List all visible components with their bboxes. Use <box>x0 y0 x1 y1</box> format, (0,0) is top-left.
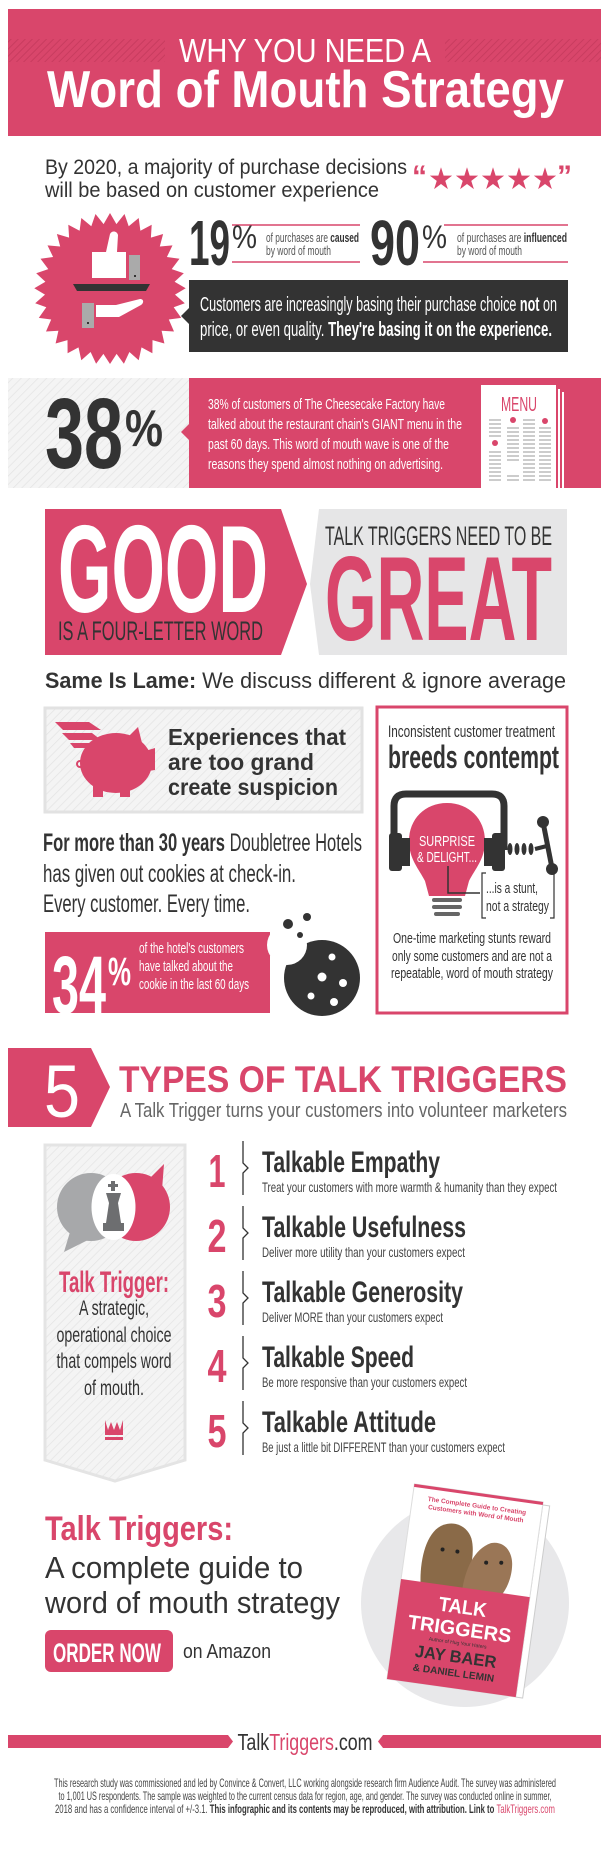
stat: 90% influenced: % <box>422 219 447 255</box>
text block: doubletree cookies: Every customer. Every time. <box>43 890 250 918</box>
stat: 90% influenced: by word of mouth <box>457 243 522 258</box>
stat: 90% influenced: of purchases are influenced <box>457 230 567 245</box>
icon: lightbulb with headphones and crank <box>389 794 558 916</box>
list: talkable speed: Talkable Speed <box>262 1341 414 1374</box>
list: talkable attitude: 5 <box>208 1405 226 1457</box>
panel: 38% cheesecake factory: % <box>125 400 163 458</box>
stat: 19% caused: 19 <box>189 207 230 279</box>
text block: book promo: word of mouth strategy <box>44 1585 340 1620</box>
stat: 90% influenced: 90 <box>370 207 420 279</box>
section heading: 5 types of talk triggers: 5 <box>44 1050 80 1133</box>
icon: bitten cookie <box>267 913 360 1016</box>
text block: doubletree cookies <box>43 829 362 918</box>
callout: experience box <box>181 280 568 352</box>
intro statement <box>44 156 407 202</box>
callout: is a stunt <box>482 873 554 918</box>
banner: good is a four-letter word: IS A FOUR-LETTER WORD <box>58 616 263 646</box>
stat: 34% cookie <box>45 932 279 1031</box>
footer: research note <box>54 1776 556 1816</box>
icon: lightbulb with headphones and crank: SURPRISE <box>419 833 475 850</box>
list: talkable usefulness: Talkable Usefulness <box>262 1211 466 1244</box>
icon: five stars in quotes: ” <box>557 160 572 193</box>
text block: book promo <box>44 1510 340 1620</box>
callout: is a stunt: ...is a stunt, <box>486 880 538 897</box>
panel: talk trigger definition ribbon: Talk Trigger: <box>59 1266 169 1299</box>
list: talkable empathy: Talkable Empathy <box>262 1146 440 1179</box>
list: talkable generosity <box>208 1271 463 1327</box>
text: experiences too grand: create suspicion <box>168 774 338 800</box>
icon: speech bubbles with chess king <box>57 1164 170 1252</box>
stat: 34% cookie: % <box>108 950 131 994</box>
stat: 19% caused <box>189 207 360 279</box>
illustration: talk triggers book <box>361 1484 569 1707</box>
icon: crown <box>105 1420 123 1440</box>
illustration: talk triggers book: Customers with Word of Mouth <box>428 1504 524 1524</box>
section heading: 5 types of talk triggers: TYPES OF TALK TRIGGERS <box>119 1059 567 1100</box>
text: experiences too grand <box>168 724 346 800</box>
icon: five stars in quotes: ★★★★★ <box>428 163 558 196</box>
illustration: talk triggers book: JAY BAER <box>414 1642 498 1672</box>
panel: talk trigger definition ribbon: of mouth. <box>84 1377 144 1400</box>
illustration: talk triggers book: The Complete Guide to Creating <box>427 1496 527 1517</box>
text: cheesecake factory description: talked about the restaurant chain's GIANT menu in the <box>208 416 462 433</box>
footer: website banner: TalkTriggers.com <box>238 1729 372 1755</box>
panel: talk trigger definition ribbon: that compels word <box>56 1350 172 1373</box>
text block: book promo: A complete guide to <box>45 1550 303 1585</box>
icon: starburst with thumbs up and hand <box>34 213 186 364</box>
list: talkable empathy: 1 <box>208 1145 226 1197</box>
illustration: talk triggers book: TALK <box>437 1594 488 1622</box>
text: cheesecake factory description: past 60 days. This word of mouth wave is one of the <box>208 436 449 453</box>
stat: 34% cookie: have talked about the <box>139 958 233 975</box>
list: talkable usefulness: 2 <box>208 1210 226 1262</box>
panel: 38% cheesecake factory <box>8 378 601 490</box>
banner: good is a four-letter word <box>45 501 307 655</box>
list: talkable empathy <box>208 1141 557 1197</box>
list: talkable generosity: Talkable Generosity <box>262 1276 463 1309</box>
intro statement: will be based on customer experience <box>44 179 379 202</box>
text: one-time stunts <box>391 930 553 982</box>
list: talkable attitude <box>208 1401 505 1457</box>
icon: five stars in quotes: “ <box>412 160 427 193</box>
intro statement: By 2020, a majority of purchase decisions <box>45 156 407 179</box>
text: on amazon: on Amazon <box>183 1641 271 1663</box>
text: cheesecake factory description: 38% of customers of The Cheesecake Factory have <box>208 396 445 413</box>
button: order now: ORDER NOW <box>53 1638 161 1668</box>
callout: is a stunt: not a strategy <box>486 898 549 915</box>
text: cheesecake factory description: reasons they spend almost nothing on advertising. <box>208 456 443 473</box>
stat: 19% caused: of purchases are caused <box>266 230 359 245</box>
stat: 19% caused: by word of mouth <box>266 243 331 258</box>
list: talkable speed <box>208 1336 467 1392</box>
text: cheesecake factory description <box>208 396 462 473</box>
stat: 34% cookie: 34 <box>52 940 106 1031</box>
icon: lightbulb with headphones and crank: & DELIGHT... <box>417 849 477 866</box>
list: talkable usefulness: Deliver more utility than your customers expect <box>262 1244 465 1260</box>
stat: 34% cookie: of the hotel's customers <box>139 940 244 957</box>
text: experiences too grand: are too grand <box>168 749 314 775</box>
text block: book promo: Talk Triggers: <box>45 1510 233 1548</box>
section heading: 5 types of talk triggers <box>8 1048 567 1133</box>
list: talkable usefulness <box>208 1206 466 1262</box>
list: talkable attitude: Talkable Attitude <box>262 1406 436 1439</box>
illustration: talk triggers book: Author of Hug Your Haters <box>428 1636 487 1651</box>
icon: flying pig <box>55 722 155 797</box>
banner: good is a four-letter word: GOOD <box>58 501 268 639</box>
big stat 38%: 38 <box>45 378 123 490</box>
stat: 34% cookie: cookie in the last 60 days <box>139 976 249 993</box>
text block: doubletree cookies: For more than 30 years Doubletree Hotels <box>43 829 362 857</box>
illustration: talk triggers book: TRIGGERS <box>407 1611 513 1648</box>
panel: talk trigger definition ribbon: A strategic, <box>79 1297 149 1320</box>
panel: talk trigger definition ribbon <box>45 1145 185 1481</box>
text block: doubletree cookies: has given out cookies at check-in. <box>43 860 296 888</box>
panel: breeds contempt <box>377 707 567 1013</box>
panel: experiences too grand <box>45 708 362 812</box>
title: why you need a: WHY YOU NEED A <box>179 32 431 69</box>
icon: menu <box>481 385 564 488</box>
illustration: talk triggers book: & DANIEL LEMIN <box>412 1663 495 1685</box>
text: experiences too grand: Experiences that <box>168 724 346 750</box>
footer: website banner <box>8 1729 601 1755</box>
panel: talk trigger definition ribbon: operational choice <box>56 1324 172 1347</box>
list: talkable generosity: 3 <box>208 1275 226 1327</box>
list: talkable speed: Be more responsive than your customers expect <box>262 1374 467 1390</box>
stat: 90% influenced <box>370 207 568 279</box>
icon: menu: MENU <box>501 394 537 416</box>
button: order now <box>45 1630 173 1672</box>
header banner <box>8 9 601 136</box>
heading: same is lame: Same Is Lame: We discuss different & ignore average <box>45 668 566 693</box>
list: talkable speed: 4 <box>208 1340 227 1392</box>
stat: 19% caused: % <box>232 219 257 255</box>
list: talkable generosity: Deliver MORE than your customers expect <box>262 1309 443 1325</box>
